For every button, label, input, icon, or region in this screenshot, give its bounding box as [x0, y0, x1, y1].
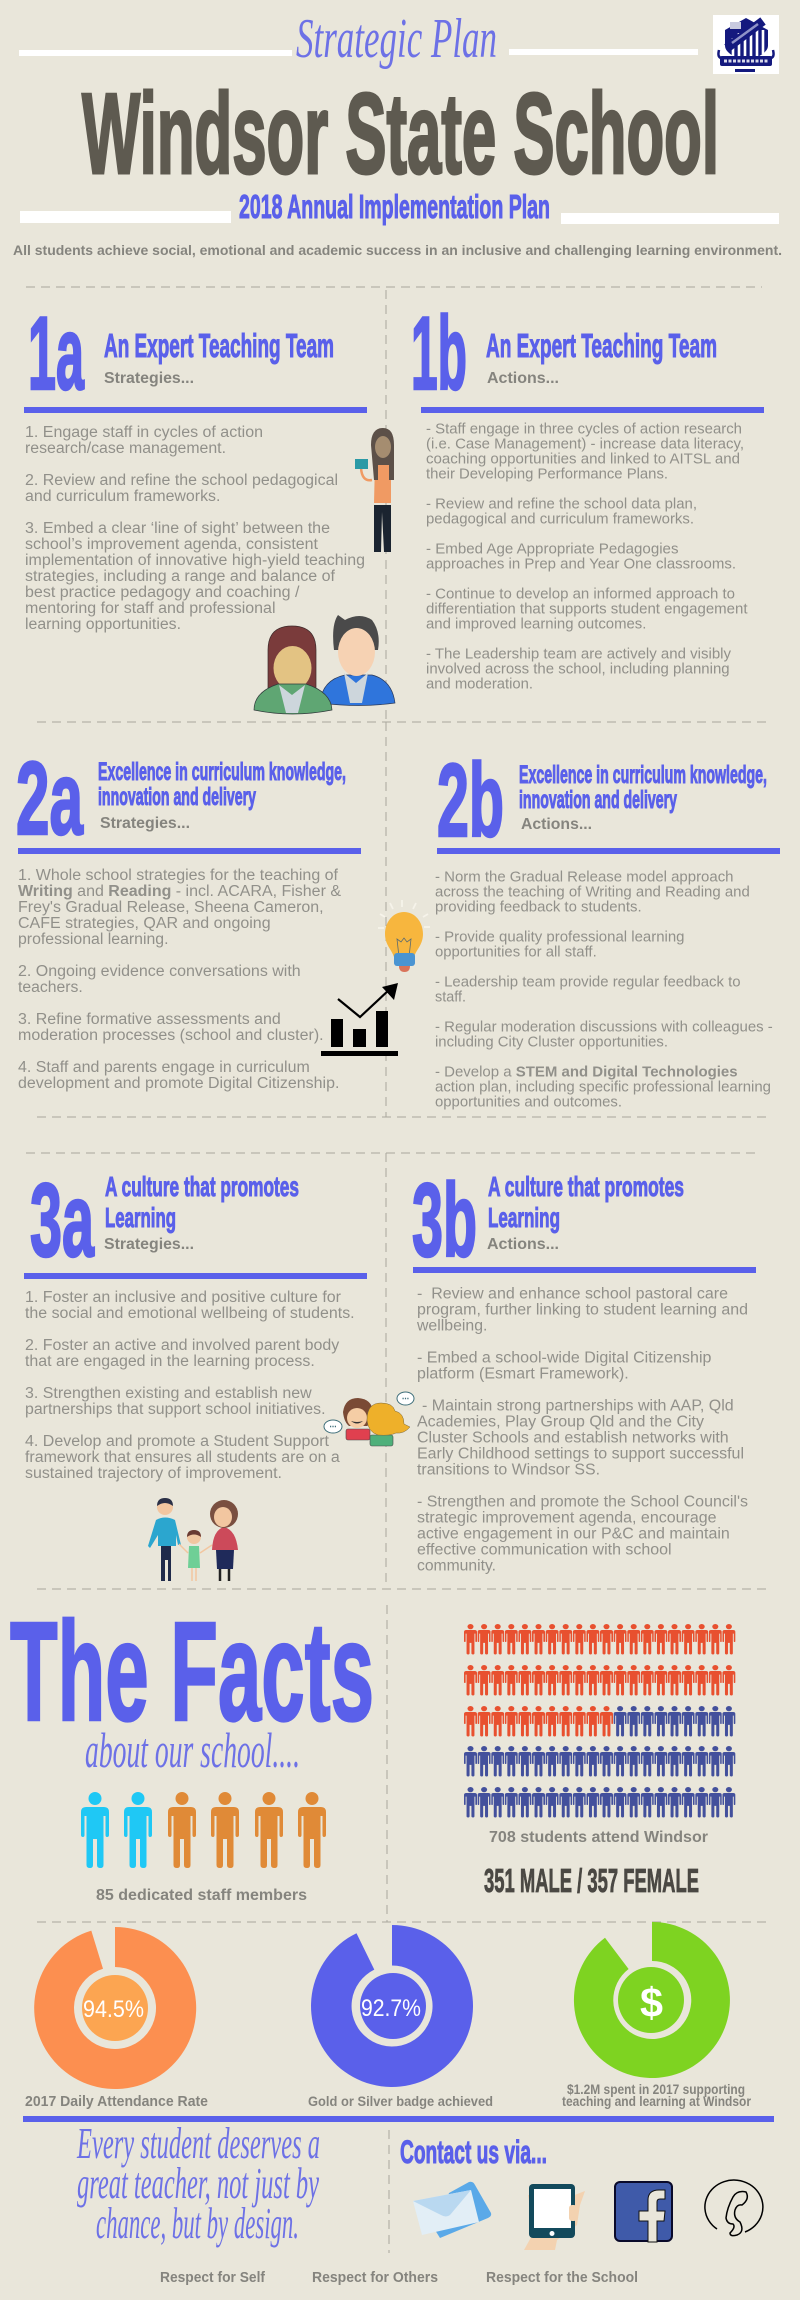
footer values: Respect for Others	[312, 2270, 438, 2286]
label actions: Actions...	[487, 1236, 559, 1253]
icon: family holding hands	[148, 1498, 238, 1581]
strategies list: 4. Develop and promote a Student Support	[25, 1433, 330, 1450]
strategies list: 4. Staff and parents engage in curriculum	[18, 1059, 310, 1076]
strategies list: 1. Foster an inclusive and positive culture for	[25, 1289, 341, 1306]
strategies list: research/case management.	[25, 440, 226, 457]
panel: student numbers	[464, 1624, 735, 1899]
strategies list: 2. Ongoing evidence conversations with	[18, 963, 301, 980]
label actions: Actions...	[521, 816, 592, 833]
label: spending: $1.2M spent in 2017 supporting	[567, 2082, 745, 2097]
panel: 2b actions	[435, 743, 780, 1110]
label: attendance rate: 2017 Daily Attendance Rate	[25, 2093, 208, 2110]
header rule right	[509, 49, 698, 55]
header rule left	[19, 50, 292, 56]
actions list: providing feedback to students.	[435, 899, 642, 915]
actions list: community.	[417, 1557, 496, 1574]
header	[13, 8, 782, 258]
actions list: (i.e. Case Management) - increase data literacy,	[426, 437, 744, 453]
quote: great teacher, not just by	[77, 2159, 319, 2208]
icon: two staff members	[254, 615, 395, 714]
panel: 1b actions: 1b	[411, 296, 467, 412]
strategies list: implementation of innovative high-yield teaching	[25, 552, 365, 569]
about our school script: about our school....	[85, 1722, 300, 1778]
number 2a: 2a	[16, 741, 84, 857]
actions list: - Embed a school-wide Digital Citizenship	[417, 1349, 711, 1366]
contact heading: Contact us via...	[400, 2134, 547, 2170]
strategies list	[18, 867, 342, 1092]
strategies list: development and promote Digital Citizenship.	[18, 1075, 339, 1092]
strategies list: learning opportunities.	[25, 616, 181, 633]
staff label: 85 dedicated staff members	[96, 1887, 307, 1904]
strategies list	[25, 424, 365, 633]
actions list: approaches in Prep and Year One classrooms.	[426, 557, 736, 573]
actions list: and moderation.	[426, 677, 533, 693]
actions list: Early Childhood settings to support successful	[417, 1445, 744, 1462]
staff pictogram	[81, 1792, 326, 1868]
icon: two people talking	[324, 1392, 414, 1446]
heading 2a	[98, 758, 346, 811]
panel: 1a strategies	[24, 296, 367, 633]
icon: facebook	[615, 2182, 672, 2242]
rule	[24, 407, 367, 413]
actions list: - Norm the Gradual Release model approach	[435, 869, 734, 885]
label: badge achieved: Gold or Silver badge achieved	[308, 2094, 493, 2109]
heading 3a: Learning	[105, 1202, 176, 1233]
strategies list: 2. Review and refine the school pedagogical	[25, 472, 338, 489]
strategies list: 3. Refine formative assessments and	[18, 1011, 281, 1028]
actions list: - The Leadership team are actively and visibly	[426, 647, 732, 663]
strategies list: Frey's Gradual Release, Sheena Cameron,	[18, 899, 324, 916]
actions list: active engagement in our P&C and maintain	[417, 1525, 730, 1542]
strategies list: framework that ensures all students are on a	[25, 1449, 340, 1466]
panel: 2a strategies	[16, 741, 361, 1092]
strategies list: partnerships that support school initiatives.	[25, 1401, 326, 1418]
heading 2a: Excellence in curriculum knowledge,	[98, 758, 346, 786]
strategies list: 1. Whole school strategies for the teaching of	[18, 867, 339, 884]
actions list: - Strengthen and promote the School Council's	[417, 1493, 748, 1510]
actions list: - Leadership team provide regular feedback to	[435, 974, 741, 990]
strategies list: the social and emotional wellbeing of students.	[25, 1305, 355, 1322]
icon: light bulb	[378, 900, 430, 972]
student pictogram	[464, 1624, 735, 1818]
strategies list: moderation processes (school and cluster).	[18, 1027, 324, 1044]
number 3b: 3b	[412, 1163, 477, 1279]
heading 3a: A culture that promotes	[105, 1171, 299, 1202]
rule	[413, 1267, 756, 1273]
strategies list: teachers.	[18, 979, 83, 996]
actions list: - Maintain strong partnerships with AAP, Qld	[422, 1397, 734, 1414]
heading 2b: innovation and delivery	[519, 786, 677, 814]
panel: 1b actions	[411, 296, 764, 693]
label strategies: Strategies...	[100, 815, 190, 832]
heading 3a	[105, 1171, 299, 1233]
panel: contact	[400, 2134, 763, 2250]
label actions: Actions...	[487, 370, 559, 387]
strategies list: and curriculum frameworks.	[25, 488, 220, 505]
donut: attendance rate: 94.5%	[83, 1996, 144, 2023]
heading 3b	[488, 1171, 684, 1233]
strategies list: that are engaged in the learning process.	[25, 1353, 315, 1370]
strategies list: CAFE strategies, QAR and ongoing	[18, 915, 271, 932]
subtitle rule left	[20, 211, 231, 223]
strategic plan script heading: Strategic Plan	[296, 8, 497, 70]
icon: email envelopes	[413, 2182, 491, 2238]
strategies list: school’s improvement agenda, consistent	[25, 536, 319, 553]
number 3a: 3a	[30, 1163, 95, 1279]
actions list: their Developing Performance Plans.	[426, 467, 668, 483]
actions list: involved across the school, including planning	[426, 662, 730, 678]
actions list: - Continue to develop an informed approach to	[426, 587, 735, 603]
actions list: strategic improvement agenda, encourage	[417, 1509, 716, 1526]
donut: spending	[574, 1922, 730, 2078]
vision statement: All students achieve social, emotional and academic success in an inclusive and challenging learning environment.	[13, 242, 782, 258]
icon: telephone handset circle	[705, 2180, 763, 2236]
strategies list: best practice pedagogy and coaching /	[25, 584, 300, 601]
heading 2b	[519, 761, 767, 814]
footer values	[160, 2270, 638, 2286]
donut: spending: $	[640, 1979, 663, 2026]
rule	[24, 1273, 367, 1279]
actions list: differentiation that supports student engagement	[426, 602, 748, 618]
quote	[76, 2119, 320, 2248]
actions list	[426, 422, 748, 693]
actions list: action plan, including specific professional learning	[435, 1079, 771, 1095]
rule	[421, 407, 764, 413]
icon: hand holding phone	[524, 2184, 585, 2250]
actions list: - Provide quality professional learning	[435, 929, 684, 945]
actions list: platform (Esmart Framework).	[417, 1365, 629, 1382]
actions list: - Review and refine the school data plan,	[426, 497, 697, 513]
actions list: staff.	[435, 989, 466, 1005]
rule	[18, 848, 361, 854]
panel: 3b actions	[412, 1163, 756, 1574]
the facts heading: The Facts	[10, 1592, 374, 1750]
strategies list: sustained trajectory of improvement.	[25, 1465, 282, 1482]
number 2b: 2b	[437, 743, 504, 859]
label strategies: Strategies...	[104, 1236, 194, 1253]
actions list: opportunities for all staff.	[435, 944, 597, 960]
actions list: wellbeing.	[416, 1317, 487, 1334]
quote: Every student deserves a	[76, 2119, 320, 2168]
strategies list: 3. Strengthen existing and establish new	[25, 1385, 313, 1402]
actions list: across the teaching of Writing and Reading and	[435, 884, 750, 900]
donut: badge achieved: 92.7%	[361, 1995, 421, 2022]
icon: school crest logo	[713, 15, 779, 74]
subtitle rule right	[561, 213, 779, 224]
footer divider bar	[23, 2116, 774, 2122]
actions list: program, further linking to student learning and	[417, 1301, 748, 1318]
heading 2a: innovation and delivery	[98, 783, 256, 811]
actions list	[416, 1285, 748, 1574]
actions list: - Develop a STEM and Digital Technologies	[435, 1064, 738, 1080]
actions list: Academies, Play Group Qld and the City	[417, 1413, 704, 1430]
heading 3b: A culture that promotes	[488, 1171, 684, 1202]
actions list: - Staff engage in three cycles of action research	[426, 422, 742, 438]
panel: 1a strategies: 1a	[28, 296, 85, 412]
strategies list: professional learning.	[18, 931, 168, 948]
actions list: effective communication with school	[417, 1541, 672, 1558]
actions list: pedagogical and curriculum frameworks.	[426, 512, 694, 528]
rule	[437, 848, 780, 854]
donut: attendance rate	[34, 1927, 196, 2089]
footer values: Respect for the School	[486, 2270, 638, 2286]
actions list: opportunities and outcomes.	[435, 1094, 622, 1110]
actions list: - Review and enhance school pastoral care	[417, 1285, 728, 1302]
icon: rising bar chart	[321, 983, 398, 1056]
students label: 708 students attend Windsor	[489, 1829, 708, 1846]
actions list: including City Cluster opportunities.	[435, 1034, 668, 1050]
actions list	[435, 869, 773, 1110]
heading 3b: Learning	[488, 1202, 560, 1233]
strategies list	[25, 1289, 355, 1482]
actions list: - Embed Age Appropriate Pedagogies	[426, 542, 678, 558]
panel: the facts staff	[10, 1592, 374, 1904]
subtitle: 2018 Annual Implementation Plan	[239, 188, 550, 225]
actions list: - Regular moderation discussions with colleagues -	[435, 1019, 773, 1035]
label: spending: teaching and learning at Windsor	[562, 2094, 752, 2109]
icon: teacher holding tablet	[355, 428, 394, 552]
panel: 3a strategies	[24, 1163, 367, 1482]
strategies list: Writing and Reading - incl. ACARA, Fisher &	[18, 883, 342, 900]
label: spending	[562, 2082, 752, 2109]
actions list: coaching opportunities and linked to AITSL and	[426, 452, 740, 468]
strategies list: strategies, including a range and balance of	[25, 568, 336, 585]
heading 1a: An Expert Teaching Team	[104, 327, 334, 364]
strategies list: 3. Embed a clear ‘line of sight’ between the	[25, 520, 330, 537]
footer values: Respect for Self	[160, 2270, 265, 2286]
actions list: and improved learning outcomes.	[426, 617, 646, 633]
strategies list: mentoring for staff and professional	[25, 600, 276, 617]
label strategies: Strategies...	[104, 370, 194, 387]
actions list: Cluster Schools and establish networks with	[417, 1429, 729, 1446]
actions list: transitions to Windsor SS.	[417, 1461, 600, 1478]
quote: chance, but by design.	[96, 2199, 299, 2248]
strategies list: 1. Engage staff in cycles of action	[25, 424, 263, 441]
strategies list: 2. Foster an active and involved parent body	[25, 1337, 340, 1354]
donut: badge achieved	[311, 1925, 473, 2087]
